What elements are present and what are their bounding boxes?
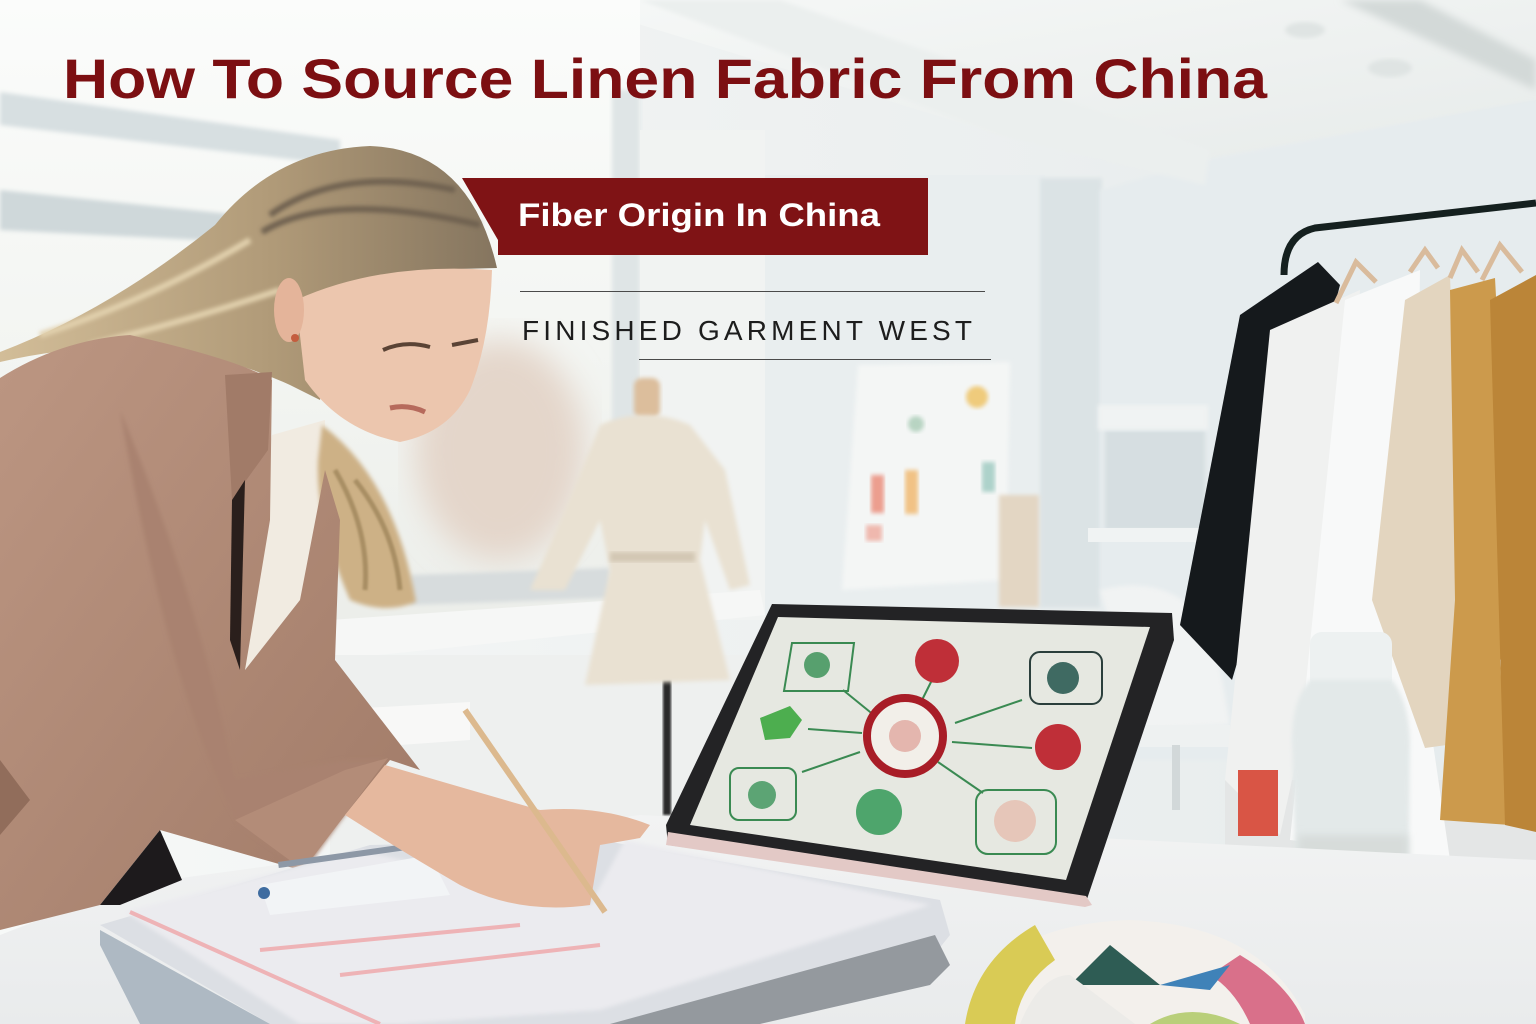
water bottle [1292, 632, 1410, 958]
wall chart board [842, 362, 1039, 607]
colour wheel swatch [965, 920, 1305, 1024]
arm and hands [345, 765, 650, 908]
clothing rack [1180, 203, 1536, 870]
tablet body [666, 604, 1174, 905]
center node [867, 698, 943, 774]
window [0, 0, 770, 855]
hair back [0, 146, 497, 400]
woman [0, 146, 497, 930]
table surface [0, 815, 1536, 1024]
banner: fiber origin: Fiber Origin In China [518, 197, 880, 233]
subheading: finished garment west: FINISHED GARMENT WEST [522, 315, 972, 346]
neck and blouse [240, 420, 325, 670]
curls front [318, 425, 416, 608]
banner: fiber origin [462, 178, 928, 255]
shelf unit [1088, 405, 1230, 810]
connector lines [802, 680, 1032, 793]
pencil [465, 710, 605, 912]
folded fabric with document [100, 840, 950, 1024]
jacket [0, 335, 420, 930]
tablet with network diagram [666, 604, 1174, 907]
tablet screen [690, 617, 1150, 880]
face [296, 269, 492, 442]
nodes [784, 643, 854, 691]
mannequin with beige dress [530, 378, 750, 815]
title: How To Source Linen Fabric From China [63, 47, 1268, 110]
